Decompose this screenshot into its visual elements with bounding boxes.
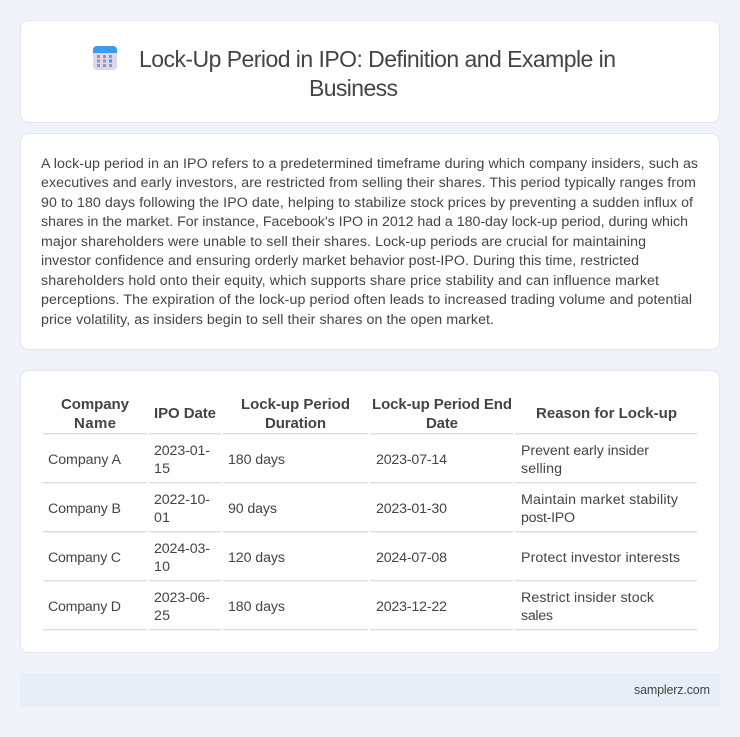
text block: definition paragraph: investor confidence and ensuring orderly market behavior post-IPO. During this time, restricted (41, 253, 639, 269)
row: Company D: sales (521, 608, 553, 624)
row: Company A: selling (521, 461, 562, 477)
row: Company A: 180 days (228, 452, 285, 468)
row: Company B: 2022-10- (154, 492, 210, 508)
text block: definition paragraph: executives and early investors, are restricted from selling their shares. This period typically ranges from (41, 175, 696, 191)
row: Company C: 120 days (228, 550, 285, 566)
table header: Reason for Lock-up (536, 405, 677, 422)
text block: definition paragraph: major shareholders were unable to sell their shares. Lock-up periods are crucial for maintaining (41, 234, 646, 250)
row: Company A: 2023-07-14 (376, 452, 447, 468)
row: Company D: 2023-12-22 (376, 599, 447, 615)
row: Company A: 2023-01- (154, 443, 210, 459)
row: Company C (48, 541, 680, 575)
row: Company D: 180 days (228, 599, 285, 615)
row: Company A: Company A (48, 452, 122, 468)
title (139, 46, 616, 101)
text block: definition paragraph: 90 to 180 days following the IPO date, helping to stabilize stock prices by preventing a sudden influx of (41, 195, 693, 211)
text block: definition paragraph: perceptions. The expiration of the lock-up period often leads to increased trading volume and potential (41, 292, 692, 308)
text block: definition paragraph: A lock-up period in an IPO refers to a predetermined timeframe during which company insiders, such as (41, 156, 698, 172)
title: Business (309, 75, 398, 101)
table: lock-up periods (43, 396, 697, 630)
text block: definition paragraph: price volatility, as insiders begin to sell their shares on the open market. (41, 312, 494, 328)
table header: Date (426, 415, 458, 432)
row: Company D: Restrict insider stock (521, 590, 655, 606)
row: Company C: Protect investor interests (521, 550, 680, 566)
text block: definition paragraph (41, 156, 698, 328)
table header: Lock-up Period (241, 396, 350, 413)
row: Company D: 25 (154, 608, 170, 624)
row: Company B: 2023-01-30 (376, 501, 447, 517)
table header: Duration (265, 415, 326, 432)
row: Company D: Company D (48, 599, 121, 615)
row: Company A: Prevent early insider (521, 443, 649, 459)
table header: Company (61, 396, 130, 413)
row: Company C: Company C (48, 550, 121, 566)
row: Company C: 10 (154, 559, 170, 575)
row: Company B: 90 days (228, 501, 277, 517)
row: Company D: 2023-06- (154, 590, 210, 606)
row: Company C: 2024-07-08 (376, 550, 447, 566)
row: Company D (48, 590, 655, 624)
table header: Lock-up Period End (372, 396, 512, 413)
row: Company A (48, 443, 649, 477)
table header: IPO Date (154, 405, 216, 422)
panel: description (20, 134, 720, 350)
row: Company B (48, 492, 679, 526)
icon: calendar (93, 46, 117, 70)
row: Company B: Maintain market stability (521, 492, 679, 508)
table header (61, 396, 677, 432)
text block: definition paragraph: shares in the market. For instance, Facebook's IPO in 2012 had a 180-day lock-up period, during which (41, 214, 688, 230)
footer bar (20, 673, 720, 707)
row: Company B: 01 (154, 510, 170, 526)
text block: definition paragraph: shareholders hold onto their equity, which supports share price stability and can influence market (41, 273, 659, 289)
panel: title card (20, 20, 720, 122)
table header: Name (74, 415, 116, 432)
footer credit: samplerz.com (634, 683, 710, 697)
row: Company A: 15 (154, 461, 170, 477)
panel: table card (20, 370, 720, 652)
row: Company B: post-IPO (521, 510, 575, 526)
row: Company C: 2024-03- (154, 541, 210, 557)
row: Company B: Company B (48, 501, 121, 517)
title: Lock-Up Period in IPO: Definition and Example in (139, 46, 616, 72)
